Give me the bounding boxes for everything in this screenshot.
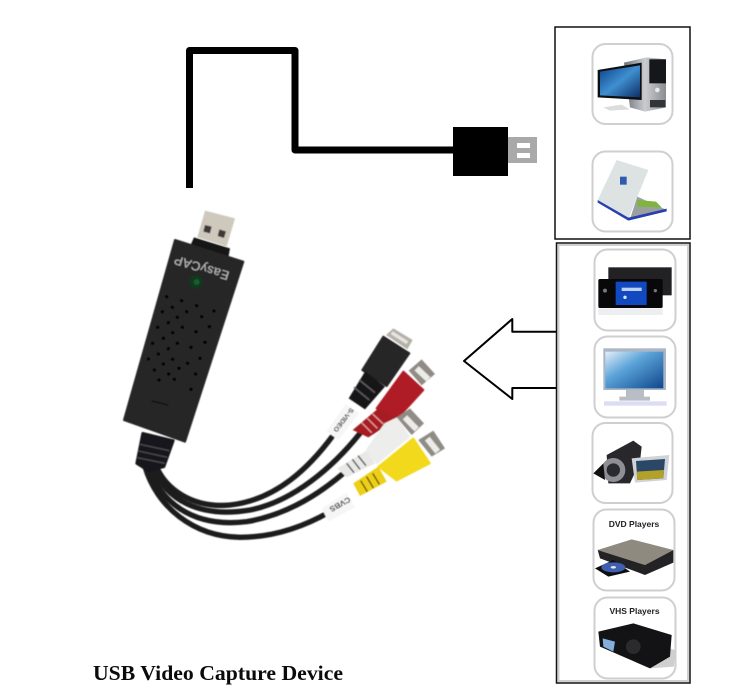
S-video connector xyxy=(349,328,413,409)
vent holes xyxy=(147,295,216,391)
panel: video sources xyxy=(556,243,690,683)
USB cable line xyxy=(190,50,455,188)
icon: DVD player xyxy=(594,510,674,590)
yellow RCA connector xyxy=(353,431,445,496)
title: USB Video Capture Device xyxy=(93,661,343,685)
arrow pointing to device xyxy=(464,319,556,399)
USB metal head xyxy=(197,211,235,247)
red RCA connector xyxy=(353,359,435,437)
photo: EasyCAP USB capture device xyxy=(124,211,445,537)
LED xyxy=(189,275,203,289)
panel: computers xyxy=(555,27,690,239)
S-video label: S-VIDEO xyxy=(331,406,355,433)
icon: desktop computer xyxy=(592,44,672,124)
device brand label: EasyCAP xyxy=(173,253,231,283)
white RCA connector xyxy=(337,408,424,477)
icon: DVD player: DVD Players xyxy=(609,519,660,529)
icon: USB plug xyxy=(453,127,537,176)
CVBS label xyxy=(322,493,355,522)
cables xyxy=(145,433,360,537)
icon: VHS player: VHS Players xyxy=(609,606,660,616)
icon: camcorder xyxy=(592,423,672,503)
icon: portable media player xyxy=(594,250,676,330)
CVBS label: CVBS xyxy=(328,495,352,514)
icon: VHS player xyxy=(594,598,676,678)
S-video label xyxy=(327,404,359,440)
body xyxy=(124,240,243,442)
icon: laptop xyxy=(592,152,672,232)
strain relief xyxy=(137,433,173,471)
icon: flat screen monitor xyxy=(594,336,676,418)
